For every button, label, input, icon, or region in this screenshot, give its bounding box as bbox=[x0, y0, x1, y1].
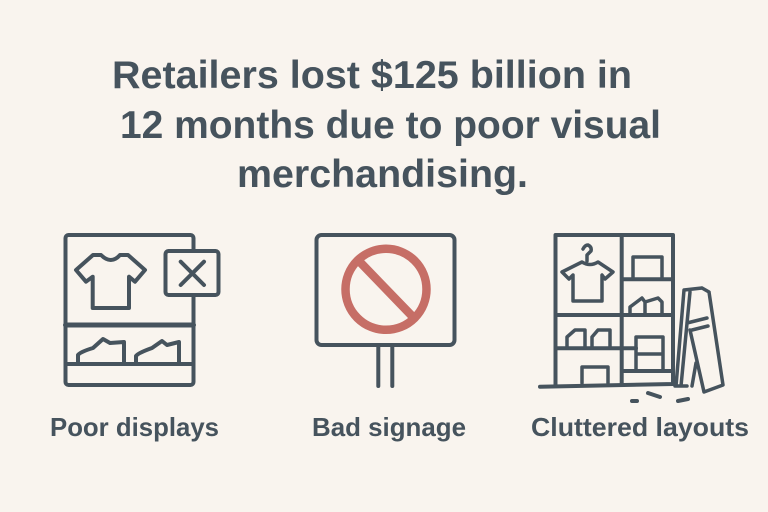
icon: x box bbox=[166, 251, 218, 295]
icon: poor displays bbox=[66, 235, 218, 385]
icon: t-shirt bbox=[76, 255, 145, 308]
title: merchandising. bbox=[237, 153, 528, 196]
title: 12 months due to poor visual bbox=[120, 104, 661, 147]
icon: cluttered layouts bbox=[540, 235, 723, 401]
icon: bad signage bbox=[316, 235, 454, 386]
icon: leaning mirror bbox=[675, 288, 723, 392]
icon: shoes bbox=[78, 339, 179, 363]
icon: prohibition sign bbox=[346, 249, 426, 330]
title bbox=[112, 54, 661, 196]
debris bbox=[632, 393, 688, 401]
icon: boxes and shoes on shelves bbox=[567, 257, 663, 383]
label: cluttered layouts: Cluttered layouts bbox=[531, 412, 749, 442]
label: poor displays: Poor displays bbox=[50, 412, 219, 442]
icon: hanger and shirt bbox=[562, 245, 613, 301]
title: Retailers lost $125 billion in bbox=[112, 54, 632, 97]
label: bad signage: Bad signage bbox=[312, 412, 466, 442]
